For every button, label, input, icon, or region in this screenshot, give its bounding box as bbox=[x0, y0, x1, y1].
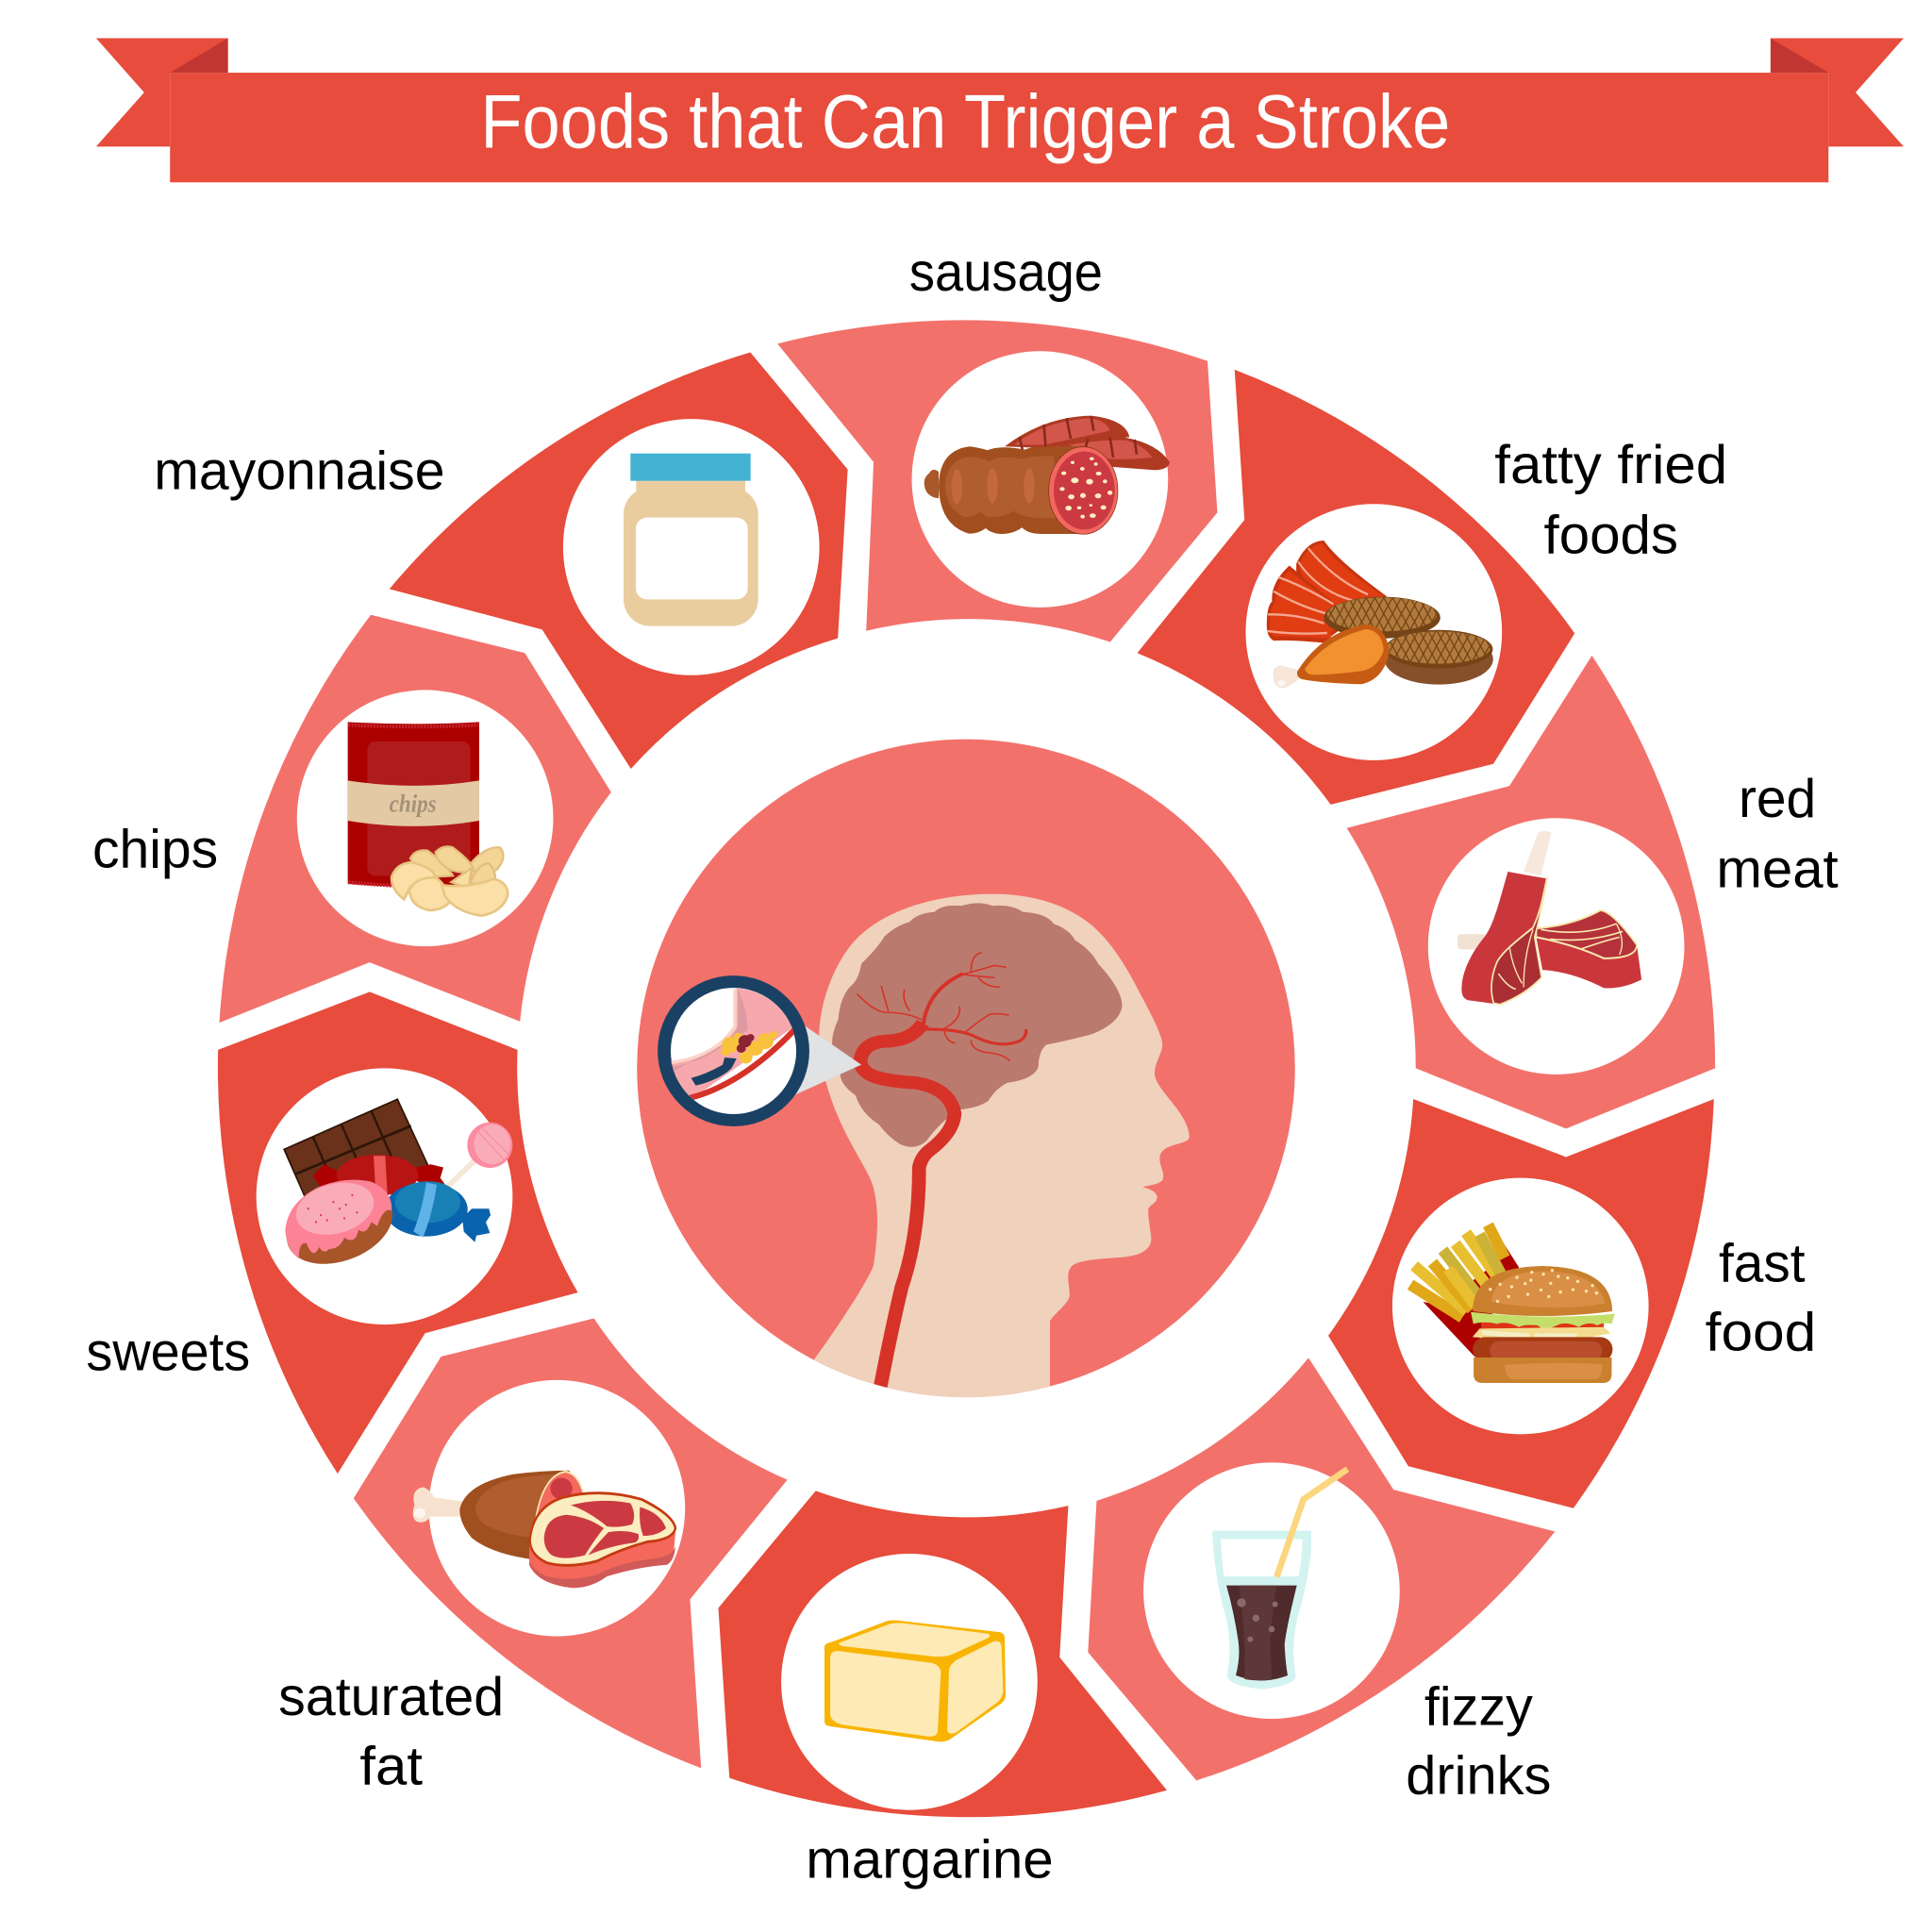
icon: sweets bbox=[280, 1098, 512, 1276]
panel: fast food segment bbox=[1328, 1099, 1714, 1508]
label: sweets: sweets bbox=[86, 1322, 250, 1382]
label: fizzy drinks: drinks bbox=[1406, 1746, 1551, 1807]
icon: mayonnaise jar bbox=[624, 454, 758, 626]
label: fast food bbox=[1706, 1233, 1816, 1363]
white circles behind food icons bbox=[257, 351, 1684, 1810]
icon: saturated fat meat bbox=[413, 1471, 675, 1588]
icon: red meat bbox=[1457, 831, 1641, 1005]
label: fatty fried foods: fatty fried bbox=[1494, 435, 1727, 495]
panel: sweets segment bbox=[218, 991, 578, 1474]
label: sausage: sausage bbox=[909, 242, 1103, 303]
icon: fatty fried foods bbox=[1267, 541, 1493, 689]
icon: margarine bbox=[824, 1620, 1006, 1741]
icon: sausage bbox=[924, 416, 1170, 534]
panel: fizzy drinks segment bbox=[1088, 1357, 1555, 1780]
panel: mayonnaise segment bbox=[390, 353, 848, 769]
label: saturated fat bbox=[278, 1667, 504, 1796]
panel: red meat segment bbox=[1347, 656, 1715, 1128]
label: fast food: food bbox=[1706, 1303, 1816, 1363]
label: saturated fat: fat bbox=[359, 1736, 423, 1796]
panel: fatty fried foods segment bbox=[1138, 370, 1574, 805]
label: fizzy drinks: fizzy bbox=[1424, 1677, 1533, 1738]
panel: margarine segment bbox=[718, 1491, 1167, 1817]
icon: fast food bbox=[1410, 1224, 1615, 1383]
label: fast food: fast bbox=[1719, 1233, 1806, 1293]
label: red meat: red bbox=[1739, 769, 1816, 829]
title banner: Foods that Can Trigger a Stroke bbox=[480, 80, 1450, 165]
label: fizzy drinks bbox=[1406, 1677, 1551, 1807]
label: red meat bbox=[1716, 769, 1839, 899]
central circle with head bbox=[637, 740, 1295, 1409]
label: saturated fat: saturated bbox=[278, 1667, 504, 1727]
panel: saturated fat segment bbox=[354, 1319, 788, 1768]
title banner bbox=[96, 38, 1904, 182]
icon: chips bag: chips bbox=[390, 790, 437, 818]
label: red meat: meat bbox=[1716, 839, 1839, 899]
label: margarine: margarine bbox=[806, 1830, 1054, 1890]
label: fatty fried foods: foods bbox=[1544, 505, 1678, 565]
panel: sausage segment bbox=[777, 320, 1217, 641]
label: mayonnaise: mayonnaise bbox=[154, 441, 445, 502]
label: chips: chips bbox=[92, 820, 218, 880]
icon: chips bag bbox=[348, 722, 508, 916]
panel: chips segment bbox=[219, 615, 611, 1023]
label: fatty fried foods bbox=[1494, 435, 1727, 565]
icon: fizzy drink bbox=[1212, 1469, 1347, 1690]
